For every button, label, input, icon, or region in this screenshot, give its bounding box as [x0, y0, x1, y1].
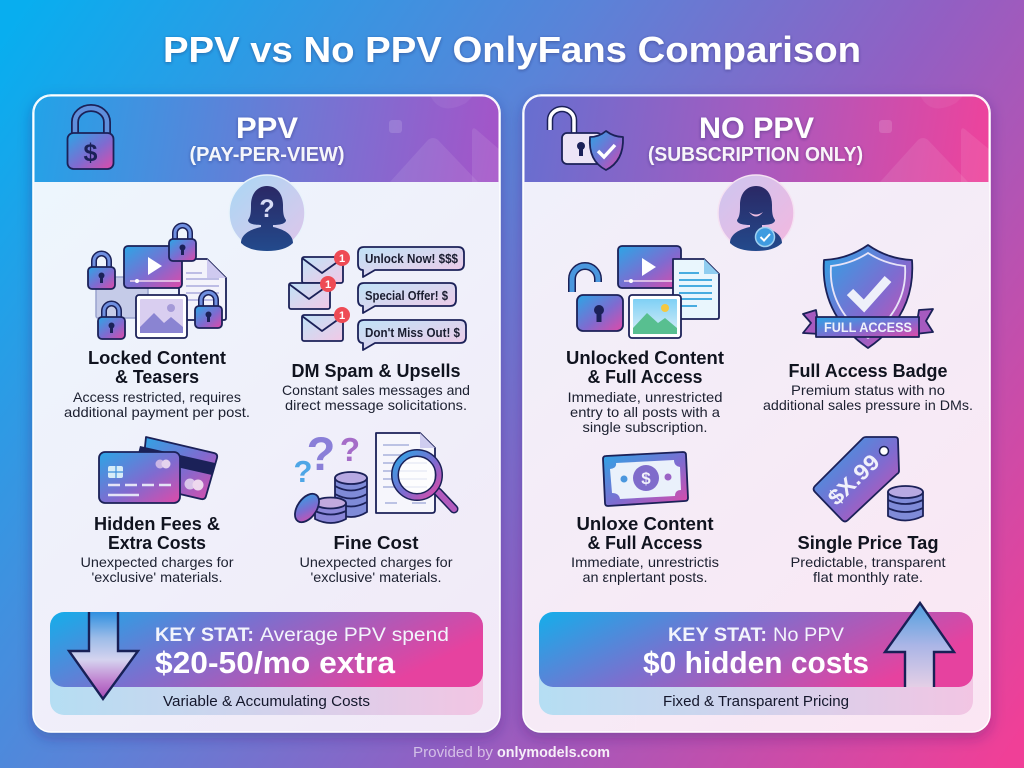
text block: single price tag: flat monthly rate. — [813, 569, 923, 585]
text block: single price tag — [790, 533, 946, 585]
text block: unloxe content: & Full Access — [588, 533, 702, 553]
icon: DM spam envelopes and bubbles: 1 — [325, 279, 331, 291]
stat label — [668, 624, 844, 646]
text block: hidden fees: 'exclusive' materials. — [92, 569, 222, 585]
subheading: subscription only: (SUBSCRIPTION ONLY) — [648, 144, 863, 166]
icon: DM spam envelopes and bubbles: 1 — [339, 310, 345, 322]
title: PPV vs No PPV OnlyFans Comparison — [163, 29, 861, 70]
icon: banknote: $ — [641, 469, 651, 488]
icon: DM spam envelopes and bubbles: Special Offer! $ — [365, 288, 449, 303]
icon: padlock with dollar — [68, 108, 114, 169]
icon: full access shield badge: FULL ACCESS — [824, 319, 912, 335]
text block: single price tag: Single Price Tag — [798, 533, 938, 553]
stat caption: Variable & Accumulating Costs — [163, 694, 370, 710]
text block: locked content — [64, 348, 250, 420]
icon: banknote — [603, 452, 688, 506]
card background — [523, 95, 990, 732]
panel: No PPV — [523, 95, 990, 732]
text block: DM spam — [282, 361, 470, 413]
text block: fine cost: 'exclusive' materials. — [310, 569, 442, 585]
stat label: KEY STAT: — [668, 624, 767, 646]
text block: unlocked content: single subscription. — [582, 419, 708, 435]
stat caption: Fixed & Transparent Pricing — [663, 694, 849, 710]
text block: fine cost: Fine Cost — [334, 533, 418, 553]
icon: price tag and coins — [814, 437, 923, 522]
icon: credit cards — [99, 437, 217, 503]
text block: unlocked content: Immediate, unrestricted — [568, 389, 722, 405]
card background — [33, 95, 500, 732]
text block: DM spam: direct message solicitations. — [285, 397, 467, 413]
icon: coins, question marks and magnifier: ? — [307, 427, 335, 480]
text block: locked content: Access restricted, requires — [73, 389, 241, 405]
text block: full access badge: additional sales pressure in DMs. — [763, 397, 973, 413]
header band — [523, 95, 990, 182]
callout: key stat PPV — [50, 612, 483, 715]
text block: unloxe content: an εnplertant posts. — [582, 569, 708, 585]
icon: locked content — [88, 226, 226, 339]
icon: full access shield badge — [803, 245, 933, 348]
text block: hidden fees: Hidden Fees & — [94, 514, 220, 534]
text block: full access badge — [763, 361, 973, 413]
icon: price tag and coins: $X.99 — [823, 449, 885, 510]
stat value: $20-50/mo extra — [155, 645, 396, 680]
stat label — [155, 624, 449, 646]
text block: unlocked content: entry to all posts with a — [570, 404, 720, 420]
icon: coins, question marks and magnifier: ? — [340, 431, 360, 468]
text block: full access badge: Full Access Badge — [788, 361, 948, 381]
text block: unloxe content: Immediate, unrestrictis — [571, 554, 719, 570]
text block: locked content: & Teasers — [115, 367, 199, 387]
icon: open padlock with shield — [550, 109, 623, 170]
icon: DM spam envelopes and bubbles: Unlock Now! $$$ — [365, 251, 459, 266]
panel: PPV — [33, 95, 500, 732]
footer credit — [413, 745, 610, 761]
text block: unlocked content — [566, 348, 724, 435]
text block: unlocked content: Unlocked Content — [566, 348, 724, 368]
icon: down arrow — [69, 612, 138, 699]
text block: DM spam: Constant sales messages and — [282, 382, 470, 398]
stat label: Average PPV spend — [260, 624, 449, 646]
icon: up arrow — [885, 603, 954, 687]
text block: DM spam: DM Spam & Upsells — [292, 361, 460, 381]
footer credit: Provided by — [413, 745, 494, 761]
text block: locked content: additional payment per post. — [64, 404, 250, 420]
icon: happy verified user avatar — [718, 175, 794, 251]
heading: PPV: PPV — [236, 112, 298, 145]
stat label: KEY STAT: — [155, 624, 254, 646]
footer credit: onlymodels.com — [497, 745, 610, 761]
text block: hidden fees — [80, 514, 234, 585]
icon: DM spam envelopes and bubbles: 1 — [339, 253, 345, 265]
icon: confused user avatar — [229, 175, 305, 251]
header band — [33, 95, 500, 182]
icon: padlock with dollar: $ — [84, 139, 98, 167]
text block: unloxe content — [571, 514, 719, 585]
icon: confused user avatar: ? — [259, 195, 275, 223]
text block: full access badge: Premium status with no — [791, 382, 945, 398]
subheading: pay-per-view: (PAY-PER-VIEW) — [190, 144, 344, 166]
text block: hidden fees: Unexpected charges for — [80, 554, 234, 570]
icon: coins, question marks and magnifier — [290, 427, 454, 527]
stat value: $0 hidden costs — [643, 645, 869, 680]
callout: key stat No PPV — [539, 603, 973, 715]
icon: coins, question marks and magnifier: ? — [294, 454, 312, 489]
heading: No PPV: NO PPV — [699, 112, 814, 145]
icon: DM spam envelopes and bubbles: Don't Miss Out! $ — [365, 325, 461, 340]
text block: locked content: Locked Content — [88, 348, 226, 368]
icon: unlocked content — [572, 246, 719, 338]
text block: hidden fees: Extra Costs — [108, 533, 206, 553]
icon: DM spam envelopes and bubbles — [289, 247, 466, 350]
stat label: No PPV — [773, 624, 844, 646]
text block: single price tag: Predictable, transparent — [790, 554, 946, 570]
text block: fine cost — [300, 533, 453, 585]
text block: fine cost: Unexpected charges for — [300, 554, 453, 570]
text block: unlocked content: & Full Access — [588, 367, 702, 387]
text block: unloxe content: Unloxe Content — [576, 514, 714, 534]
